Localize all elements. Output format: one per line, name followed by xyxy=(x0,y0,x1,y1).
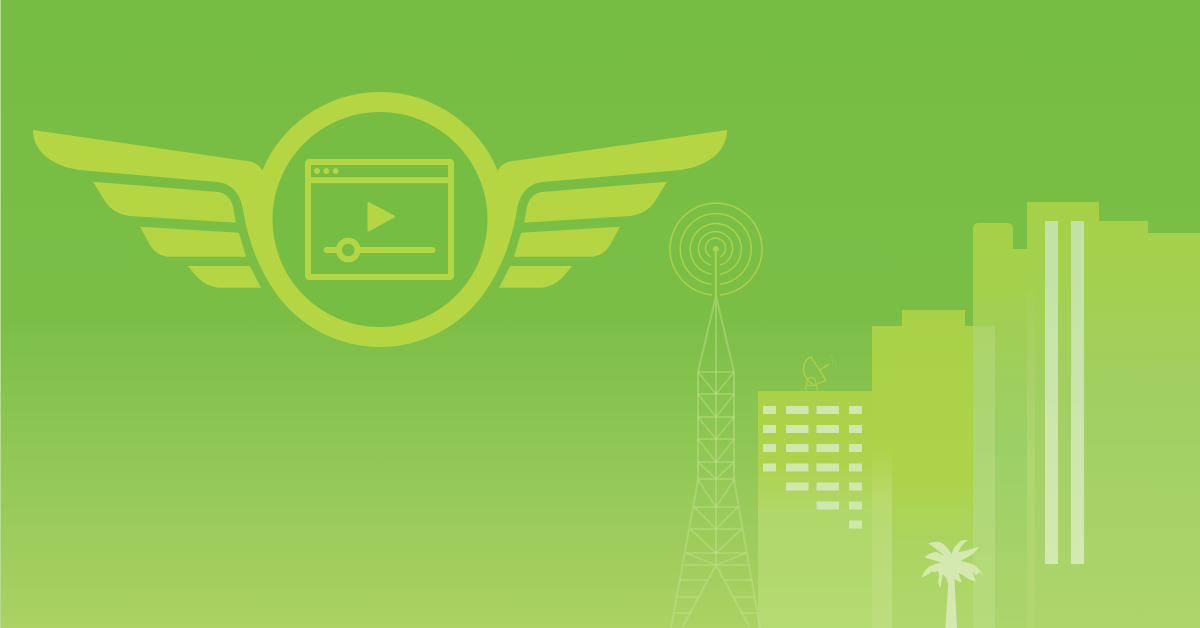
tower horizontal braces xyxy=(675,372,757,613)
progress slider xyxy=(326,247,432,253)
logo: winged video badge xyxy=(33,102,727,337)
building: far right tower xyxy=(1027,202,1200,628)
window dots xyxy=(314,168,339,174)
tower window bars xyxy=(1045,221,1084,564)
left wing xyxy=(33,130,300,310)
antenna mast xyxy=(715,249,717,298)
icon: radio signal rings xyxy=(670,203,762,298)
building: centre block xyxy=(872,310,973,628)
centre block light strip right xyxy=(973,326,995,628)
centre block light strip left xyxy=(872,445,892,628)
right wing xyxy=(460,130,727,310)
left edge line xyxy=(0,0,1,628)
player frame xyxy=(308,162,451,277)
icon: palm tree xyxy=(922,540,984,628)
antenna tip xyxy=(713,246,719,252)
icon: broadcast tower xyxy=(671,296,760,628)
building windows xyxy=(763,406,862,528)
tower upper spire xyxy=(698,296,734,565)
tower lattice legs xyxy=(671,372,760,628)
slider knob xyxy=(339,241,358,259)
building: low block xyxy=(758,391,872,628)
tower diagonal braces xyxy=(686,372,746,565)
badge ring xyxy=(262,102,498,337)
icon: satellite dish xyxy=(804,355,836,390)
player title bar line xyxy=(308,177,451,183)
icon: video player window xyxy=(308,162,451,277)
building: rounded tower xyxy=(973,223,1027,628)
tower light strip xyxy=(1027,290,1035,628)
play triangle xyxy=(368,203,394,230)
